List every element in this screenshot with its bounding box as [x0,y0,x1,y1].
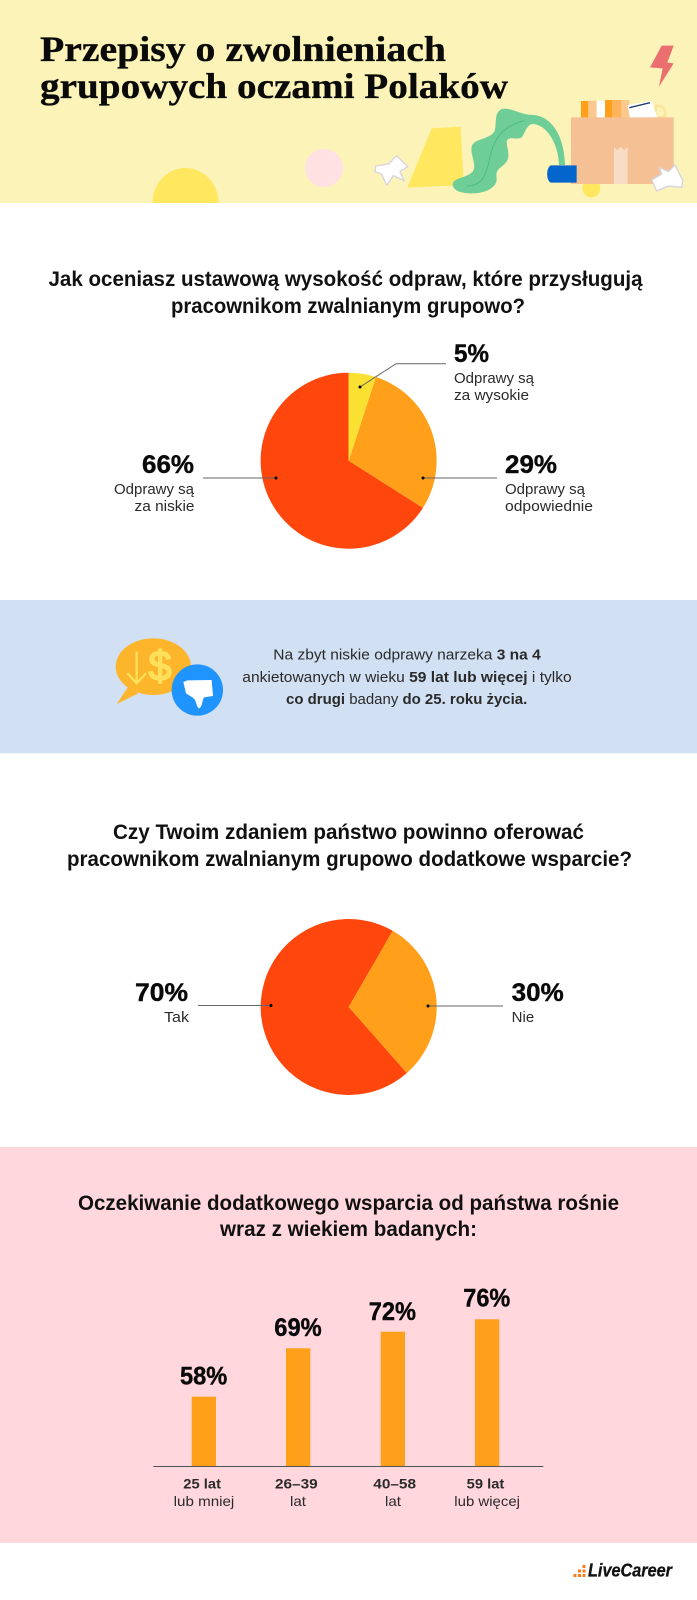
text: insight: ankietowanych w wieku 59 lat lub więcej i tylko [242,670,572,686]
slice: 5% too high [349,373,376,461]
slice: 66% too low [261,373,423,549]
heading: state support question: Czy Twoim zdaniem państwo powinno oferować [113,821,584,844]
text: insight: Na zbyt niskie odprawy narzeka 3 na 4 [273,648,541,664]
panel: pink age section [0,1147,697,1543]
heading: age trend: Oczekiwanie dodatkowego wsparcia od państwa rośnie [78,1192,619,1215]
callout: 29% [422,451,593,515]
chart: bars by age [153,1285,543,1509]
logo: LiveCareer: LiveCareer [588,1560,673,1580]
title: Przepisy o zwolnieniach [40,29,446,69]
title [40,29,508,106]
axis [153,1466,543,1468]
icon: blue pot [547,165,577,183]
bar: 26–39 lat: lat [290,1493,306,1509]
bar: 40–58 lat: 40–58 [373,1476,416,1492]
icon: wilted plant [453,109,565,193]
icon: logo dots [574,1565,586,1577]
icon: crumpled paper left [375,156,408,185]
panel: blue insight band [0,600,697,753]
bar: 25 lat lub mniej: 25 lat [183,1476,221,1492]
callout: 29%: 29% [505,451,557,479]
heading: state support question: pracownikom zwalnianym grupowo dodatkowe wsparcie? [67,848,632,871]
bar: 25 lat lub mniej: 58% [180,1363,227,1391]
bar: 25 lat lub mniej: lub mniej [174,1493,234,1509]
bar: 40–58 lat: 72% [369,1298,416,1326]
bar: 59 lat lub więcej [454,1285,520,1509]
icon: down arrow [127,652,146,683]
icon: crumpled paper right [652,165,683,191]
title: grupowych oczami Polaków [40,66,508,106]
callout: 5%: Odprawy są [454,371,535,387]
text: insight [242,648,572,708]
bar: 26–39 lat: 26–39 [275,1476,318,1492]
bar: 40–58 lat [369,1298,416,1509]
callout: 66%: 66% [142,451,194,479]
heading: state support question [67,821,632,871]
icon: dollar sign: $ [148,642,172,689]
callout: 29%: odpowiednie [505,499,593,515]
bar: 26–39 lat: 69% [274,1314,322,1342]
bar: 59 lat lub więcej: lub więcej [454,1493,520,1509]
slice: 70% yes [261,919,407,1095]
bar: 26–39 lat [274,1314,322,1509]
callout: 66%: Odprawy są [114,482,195,498]
slice: 30% no [349,931,437,1073]
heading: severance question [48,268,643,318]
callout: 5%: za wysokie [454,388,529,404]
icon: yellow ball [582,179,600,197]
callout: 66%: za niskie [134,499,194,515]
heading: severance question: Jak oceniasz ustawową wysokość odpraw, które przysługują [48,268,643,291]
callout: 30%: Nie [512,1010,534,1026]
callout: 70%: Tak [164,1010,190,1026]
chart: state support pie [135,919,564,1095]
callout: 70% [135,979,272,1026]
heading: age trend [78,1192,619,1241]
callout: 66% [114,451,278,515]
icon: speech bubble with dollar and thumbs down [116,638,223,716]
heading: severance question: pracownikom zwalnianym grupowo? [171,295,525,318]
bar: 25 lat lub mniej [174,1363,234,1509]
icon: mug [628,101,665,118]
icon: speech bubble [116,638,191,704]
decoration: yellow semicircle [152,168,218,203]
bar: 59 lat lub więcej: 76% [463,1285,510,1313]
callout: 30%: 30% [512,979,564,1007]
callout: 30% [426,979,564,1026]
icon: thumbs down badge [172,664,223,716]
heading: age trend: wraz z wiekiem badanych: [219,1218,477,1241]
icon: books in box [581,100,629,118]
icon: lightning bolt [650,46,674,87]
text: insight: co drugi badany do 25. roku życia. [286,692,527,708]
bar: 40–58 lat: lat [385,1493,401,1509]
callout: 5%: 5% [454,340,489,368]
icon: cardboard box [571,117,674,184]
illustration: desk items and cardboard box [375,46,683,197]
callout: 5% [358,340,535,404]
chart: severance pie [114,340,593,549]
icon: lamp shade [407,127,464,188]
callout: 70%: 70% [135,979,188,1007]
bar: 59 lat lub więcej: 59 lat [467,1476,505,1492]
slice: 29% adequate [349,377,437,508]
decoration: pink circle [305,149,343,187]
callout: 29%: Odprawy są [505,482,586,498]
panel: header banner [0,0,697,203]
